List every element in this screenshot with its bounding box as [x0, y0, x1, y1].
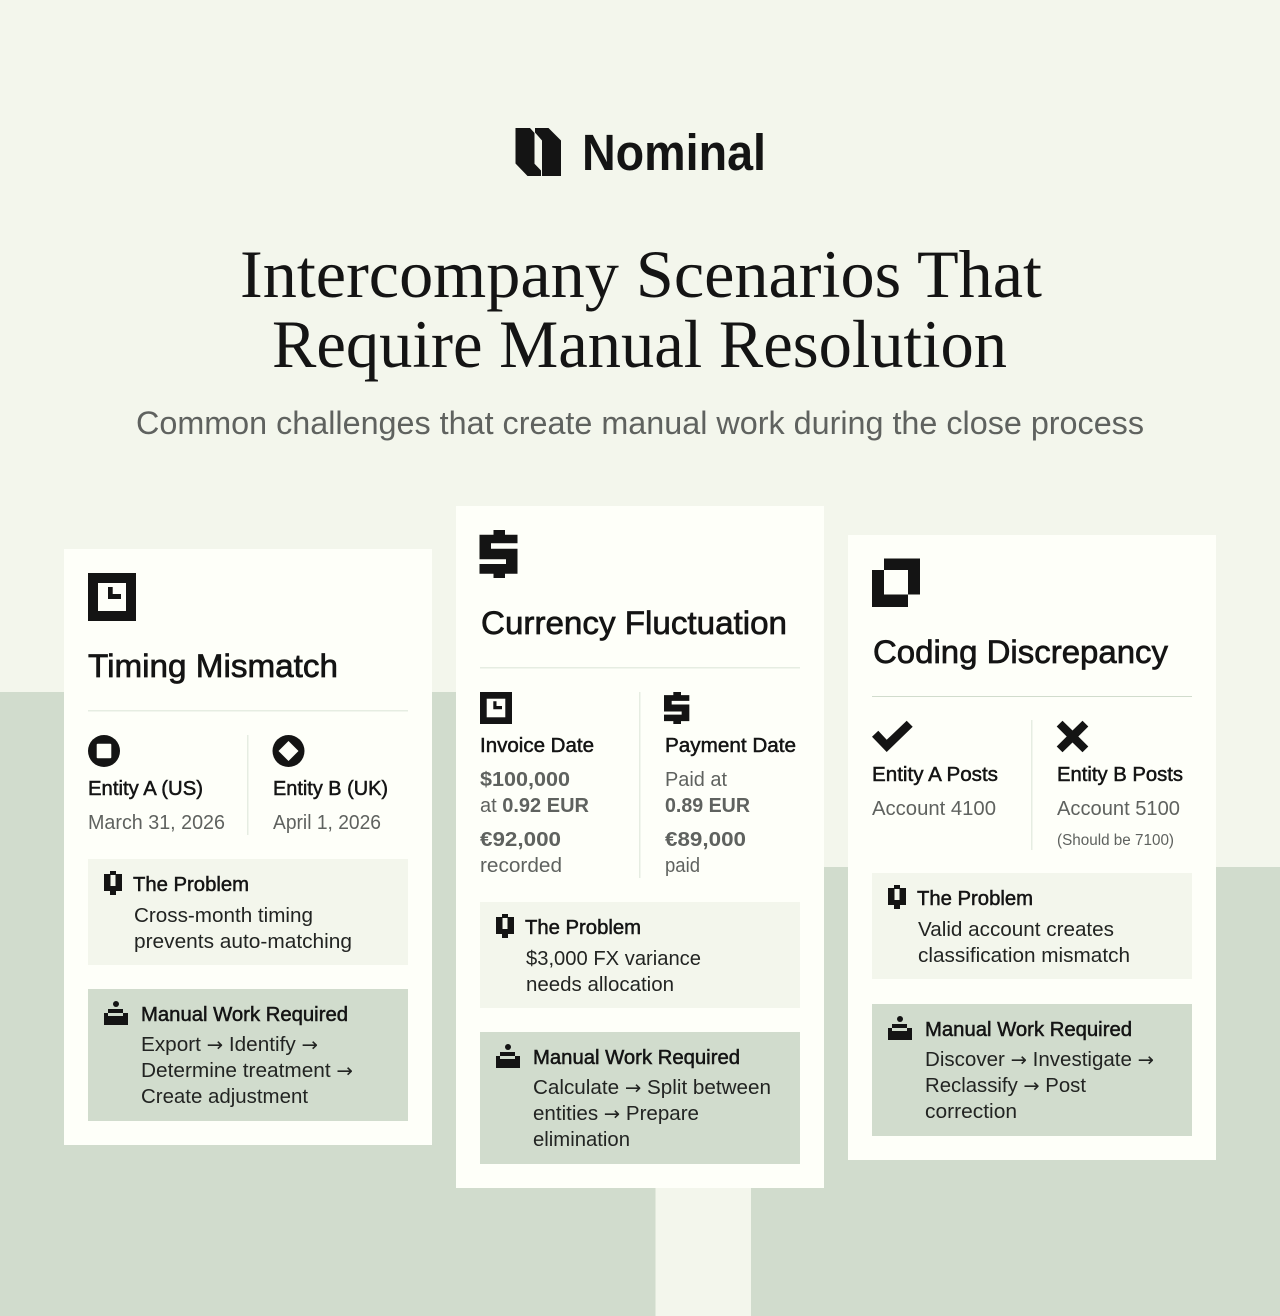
callout: the problem — [872, 873, 1192, 979]
entity A: Entity A (US) — [88, 778, 203, 800]
entity A posts: Account 4100 — [872, 798, 996, 820]
callout: manual work required — [480, 1032, 800, 1164]
callout: the problem: Cross-month timing — [134, 905, 313, 927]
callout: the problem: The Problem — [917, 888, 1033, 910]
callout: manual work required: entities → Prepare — [533, 1103, 699, 1125]
panel: Timing Mismatch — [64, 549, 432, 1145]
callout: manual work required: Determine treatment → — [141, 1060, 353, 1082]
entity A: March 31, 2026 — [88, 812, 225, 834]
invoice date column: recorded — [480, 855, 562, 877]
heading: Currency Fluctuation — [481, 605, 787, 641]
callout: the problem — [88, 859, 408, 965]
icon: check — [872, 721, 913, 752]
callout: manual work required: correction — [925, 1101, 1017, 1123]
callout: manual work required: Discover → Investigate → — [925, 1049, 1154, 1071]
callout: the problem: classification mismatch — [918, 945, 1130, 967]
callout: manual work required: Reclassify → Post — [925, 1075, 1086, 1097]
callout: manual work required: Calculate → Split between — [533, 1077, 771, 1099]
heading: Coding Discrepancy — [873, 634, 1168, 670]
callout: manual work required: elimination — [533, 1129, 630, 1151]
entity A posts — [872, 721, 998, 820]
subtitle: Common challenges that create manual work during the close process — [136, 405, 1144, 441]
wordmark: Nominal — [582, 124, 766, 181]
title: Require Manual Resolution — [272, 306, 1007, 382]
callout: the problem: Valid account creates — [918, 919, 1114, 941]
panel: Currency Fluctuation — [456, 506, 824, 1188]
payment date column — [664, 692, 796, 877]
payment date column: Payment Date — [665, 735, 796, 757]
invoice date column: Invoice Date — [480, 735, 594, 757]
callout: the problem: The Problem — [525, 917, 641, 939]
entity A — [88, 735, 225, 834]
payment date column: Paid at — [665, 769, 727, 791]
callout: the problem: The Problem — [133, 874, 249, 896]
payment date column: €89,000 — [665, 829, 746, 851]
callout: manual work required: Create adjustment — [141, 1086, 308, 1108]
icon: small clock — [480, 692, 512, 724]
callout: the problem: needs allocation — [526, 974, 674, 996]
callout: the problem — [480, 902, 800, 1008]
callout: the problem: $3,000 FX variance — [526, 948, 701, 970]
invoice date column — [480, 692, 594, 877]
title: Intercompany Scenarios That — [240, 236, 1042, 312]
payment date column: paid — [665, 855, 700, 877]
invoice date column: at 0.92 EUR — [480, 795, 590, 817]
icon: offset squares — [872, 558, 920, 607]
entity B: April 1, 2026 — [273, 812, 381, 834]
callout: manual work required: Manual Work Required — [141, 1004, 348, 1026]
logo: Nominal — [516, 124, 766, 181]
icon: Nominal mark — [516, 128, 561, 176]
invoice date column: $100,000 — [480, 769, 570, 791]
callout: manual work required: Manual Work Required — [925, 1019, 1132, 1041]
entity B posts: (Should be 7100) — [1057, 832, 1174, 849]
title — [240, 236, 1042, 382]
entity B posts: Entity B Posts — [1057, 764, 1183, 786]
callout: the problem: prevents auto-matching — [134, 931, 352, 953]
panel: Coding Discrepancy — [848, 535, 1216, 1160]
icon: small dollar — [664, 692, 689, 724]
icon: dollar — [480, 530, 518, 578]
callout: manual work required: Manual Work Required — [533, 1047, 740, 1069]
payment date column: 0.89 EUR — [665, 795, 751, 817]
callout: manual work required: Export → Identify → — [141, 1034, 318, 1056]
icon: cross — [1057, 721, 1088, 752]
background: colour blocks — [0, 692, 1280, 1316]
heading: Timing Mismatch — [88, 648, 338, 684]
entity A posts: Entity A Posts — [872, 764, 998, 786]
entity B: Entity B (UK) — [273, 778, 388, 800]
entity B posts: Account 5100 — [1057, 798, 1180, 820]
invoice date column: €92,000 — [480, 829, 561, 851]
callout: manual work required — [88, 989, 408, 1121]
callout: manual work required — [872, 1004, 1192, 1136]
entity B posts — [1057, 721, 1183, 849]
icon: clock — [88, 573, 136, 621]
entity B — [272, 735, 388, 834]
